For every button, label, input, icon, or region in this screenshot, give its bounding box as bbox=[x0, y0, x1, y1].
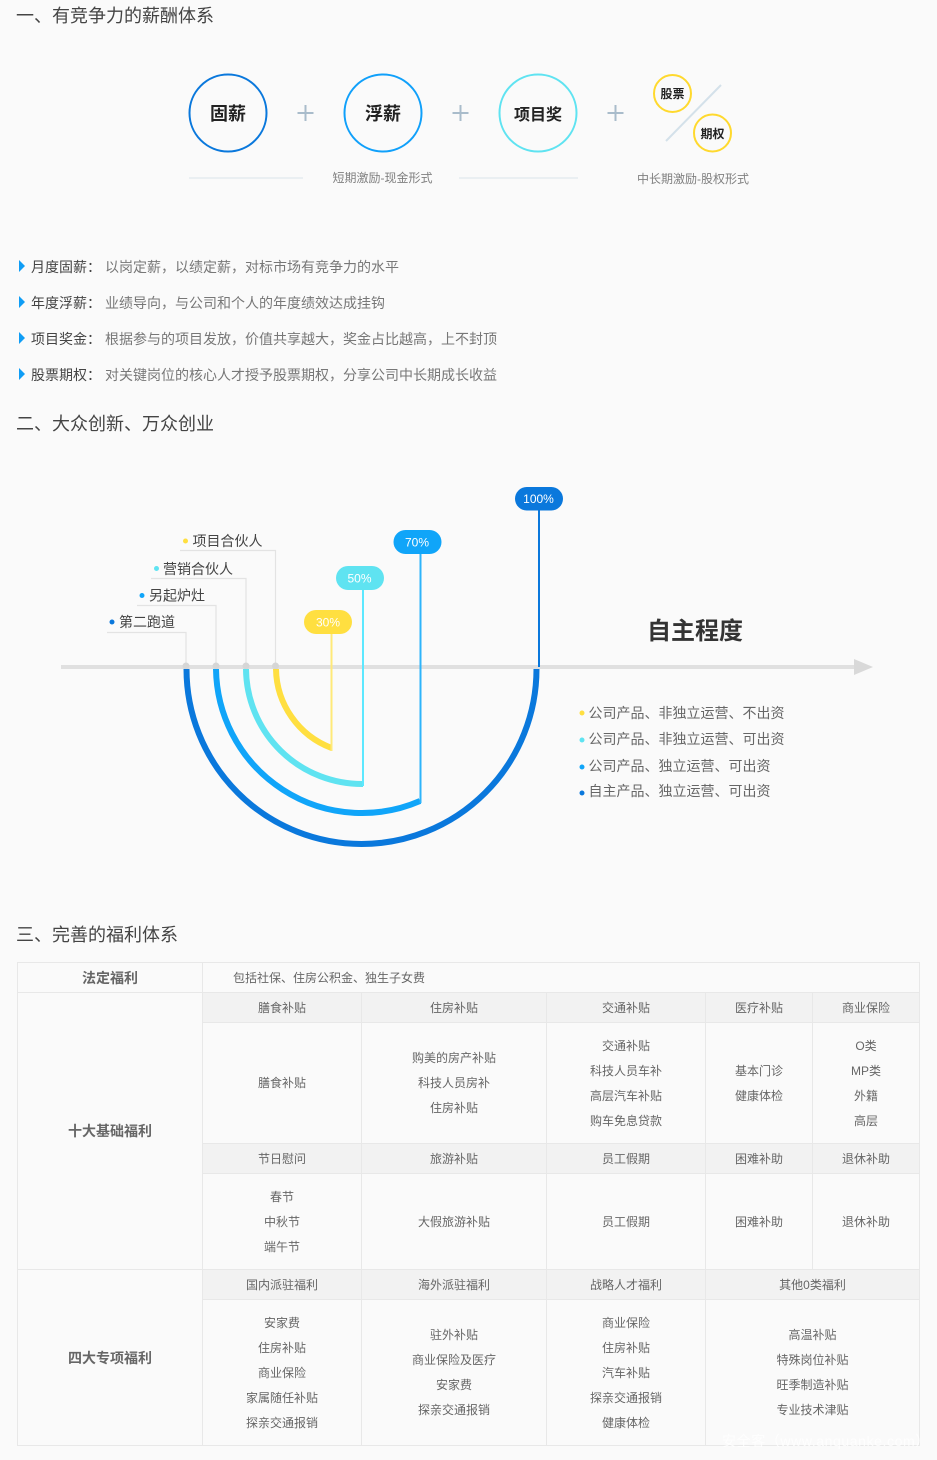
table: benefits: 探亲交通报销 bbox=[246, 1416, 318, 1430]
legend: 公司产品、独立运营、可出资 bbox=[588, 758, 770, 774]
table: benefits: 商业保险 bbox=[258, 1366, 306, 1380]
table: benefits: 汽车补贴 bbox=[602, 1366, 650, 1380]
table: benefits: 住房补贴 bbox=[258, 1340, 306, 1354]
table: benefits: MP类 bbox=[851, 1064, 881, 1078]
circle: project bonus: 项目奖 bbox=[514, 105, 562, 124]
legend bbox=[580, 705, 784, 799]
caption: short-term incentive: 短期激励-现金形式 bbox=[332, 170, 432, 185]
table: benefits: 国内派驻福利 bbox=[246, 1278, 318, 1292]
table: benefits: 节日慰问 bbox=[258, 1152, 306, 1166]
heading: section three: 三、完善的福利体系 bbox=[16, 925, 178, 945]
table: benefits: 十大基础福利 bbox=[68, 1123, 152, 1139]
label: marketing partner: 营销合伙人 bbox=[163, 561, 233, 577]
table: benefits: O类 bbox=[855, 1038, 877, 1052]
circle: floating salary bbox=[344, 74, 422, 152]
arc: 50 percent: 50% bbox=[347, 572, 372, 586]
table: benefits: 大假旅游补贴 bbox=[418, 1214, 490, 1228]
circle: floating salary: 浮薪 bbox=[365, 104, 401, 124]
chart: autonomy semicircles bbox=[61, 487, 872, 847]
table: benefits: 安家费 bbox=[264, 1316, 300, 1330]
chart title: autonomy: 自主程度 bbox=[647, 618, 743, 645]
table: benefits: 基本门诊 bbox=[735, 1064, 783, 1078]
table: benefits: 购美的房产补贴 bbox=[412, 1051, 496, 1065]
icon: plus two bbox=[452, 105, 468, 121]
arc: 100 percent bbox=[186, 487, 563, 844]
table: benefits: 高温补贴 bbox=[789, 1328, 837, 1342]
icon: equity fraction: 股票 bbox=[660, 87, 685, 101]
table: benefits: 专业技术津贴 bbox=[777, 1403, 849, 1417]
table: benefits: 商业保险 bbox=[602, 1316, 650, 1330]
table: benefits: 旅游补贴 bbox=[430, 1152, 478, 1166]
icon: plus one bbox=[298, 105, 314, 121]
table: benefits: 家属随任补贴 bbox=[246, 1390, 318, 1404]
table: benefits: 困难补助 bbox=[735, 1152, 783, 1166]
table: benefits: 健康体检 bbox=[735, 1088, 783, 1102]
leader lines bbox=[107, 550, 276, 667]
table: benefits: 交通补贴 bbox=[602, 1038, 650, 1052]
text block: compensation bullets bbox=[19, 257, 497, 385]
arc: 30 percent bbox=[276, 610, 352, 751]
bullet: stock options: 股票期权： bbox=[31, 365, 101, 385]
panel: compensation formula bbox=[188, 74, 749, 186]
bullet: project bonus: 项目奖金： bbox=[31, 329, 101, 349]
table: benefits: 其他0类福利 bbox=[779, 1278, 846, 1292]
table: benefits: 包括社保、住房公积金、独生子女费 bbox=[233, 970, 425, 984]
arc: 30 percent: 30% bbox=[316, 616, 340, 630]
axis arrow bbox=[61, 659, 873, 675]
table: benefits: 四大专项福利 bbox=[68, 1350, 152, 1366]
table: benefits: 退休补助 bbox=[842, 1152, 890, 1166]
caption: long-term incentive: 中长期激励-股权形式 bbox=[637, 171, 749, 186]
table: benefits: 高层汽车补贴 bbox=[590, 1088, 662, 1102]
table: benefits: 科技人员房补 bbox=[418, 1076, 490, 1090]
table: benefits: 驻外补贴 bbox=[430, 1328, 478, 1342]
circle: fixed salary bbox=[190, 74, 266, 152]
table: benefits: 探亲交通报销 bbox=[590, 1390, 662, 1404]
bullet: monthly salary: 以岗定薪，以绩定薪，对标市场有竞争力的水平 bbox=[105, 257, 399, 277]
table: benefits: 特殊岗位补贴 bbox=[777, 1353, 849, 1367]
table: benefits: 健康体检 bbox=[602, 1416, 650, 1430]
table: benefits: 商业保险 bbox=[842, 1000, 890, 1014]
label: new venture: 另起炉灶 bbox=[149, 588, 205, 604]
heading: section two: 二、大众创新、万众创业 bbox=[16, 414, 214, 434]
table: benefits: 海外派驻福利 bbox=[418, 1278, 490, 1292]
arc: 50 percent bbox=[246, 566, 384, 786]
table: benefits: 交通补贴 bbox=[602, 1000, 650, 1014]
arc: 100 percent: 100% bbox=[523, 492, 554, 506]
table: benefits: 战略人才福利 bbox=[590, 1278, 662, 1292]
table: benefits: 中秋节 bbox=[264, 1214, 300, 1228]
bullet: monthly salary: 月度固薪： bbox=[31, 257, 101, 277]
table: benefits: 困难补助 bbox=[735, 1214, 783, 1228]
table: benefits bbox=[17, 962, 920, 1446]
circle: fixed salary: 固薪 bbox=[210, 104, 246, 124]
icon: equity fraction bbox=[654, 75, 731, 152]
table: benefits: 科技人员车补 bbox=[590, 1064, 662, 1078]
table: benefits: 退休补助 bbox=[842, 1214, 890, 1228]
icon: equity fraction: 期权 bbox=[700, 126, 725, 141]
table: benefits: 住房补贴 bbox=[430, 1101, 478, 1115]
table: benefits: 商业保险及医疗 bbox=[412, 1353, 496, 1367]
bullet: project bonus: 根据参与的项目发放，价值共享越大，奖金占比越高，上不封顶 bbox=[105, 329, 497, 349]
icon: plus three bbox=[608, 105, 624, 121]
table: benefits: 法定福利 bbox=[82, 970, 138, 986]
legend: 公司产品、非独立运营、不出资 bbox=[588, 705, 784, 721]
table: benefits: 员工假期 bbox=[602, 1152, 650, 1166]
legend: 自主产品、独立运营、可出资 bbox=[588, 783, 770, 799]
table: benefits: 高层 bbox=[854, 1114, 878, 1128]
table: benefits: 住房补贴 bbox=[430, 1000, 478, 1014]
table: benefits: 外籍 bbox=[854, 1088, 878, 1102]
table: benefits: 安家费 bbox=[436, 1378, 472, 1392]
circle: project bonus bbox=[500, 74, 576, 152]
table: benefits: 旺季制造补贴 bbox=[777, 1378, 849, 1392]
arc: 70 percent bbox=[216, 530, 442, 813]
label: project partner: 项目合伙人 bbox=[192, 533, 262, 549]
heading: section one: 一、有竞争力的薪酬体系 bbox=[16, 6, 214, 26]
table: benefits: 膳食补贴 bbox=[258, 1000, 306, 1014]
bullet: annual bonus: 年度浮薪： bbox=[31, 293, 101, 313]
legend: 公司产品、非独立运营、可出资 bbox=[588, 731, 784, 747]
table: benefits: 医疗补贴 bbox=[735, 1000, 783, 1014]
label: second track: 第二跑道 bbox=[119, 614, 175, 630]
table: benefits: 住房补贴 bbox=[602, 1340, 650, 1354]
watermark: 安全客（www.anquanke.com） bbox=[722, 1433, 930, 1449]
table: benefits: 购车免息贷款 bbox=[590, 1114, 662, 1128]
table: benefits: 膳食补贴 bbox=[258, 1076, 306, 1090]
arc: 70 percent: 70% bbox=[405, 536, 429, 550]
table: benefits: 员工假期 bbox=[602, 1214, 650, 1228]
bullet: stock options: 对关键岗位的核心人才授予股票期权，分享公司中长期成长收益 bbox=[105, 365, 497, 385]
bullet: annual bonus: 业绩导向，与公司和个人的年度绩效达成挂钩 bbox=[105, 293, 385, 313]
table: benefits: 春节 bbox=[270, 1190, 294, 1204]
table: benefits: 端午节 bbox=[264, 1240, 300, 1254]
table: benefits: 探亲交通报销 bbox=[418, 1403, 490, 1417]
